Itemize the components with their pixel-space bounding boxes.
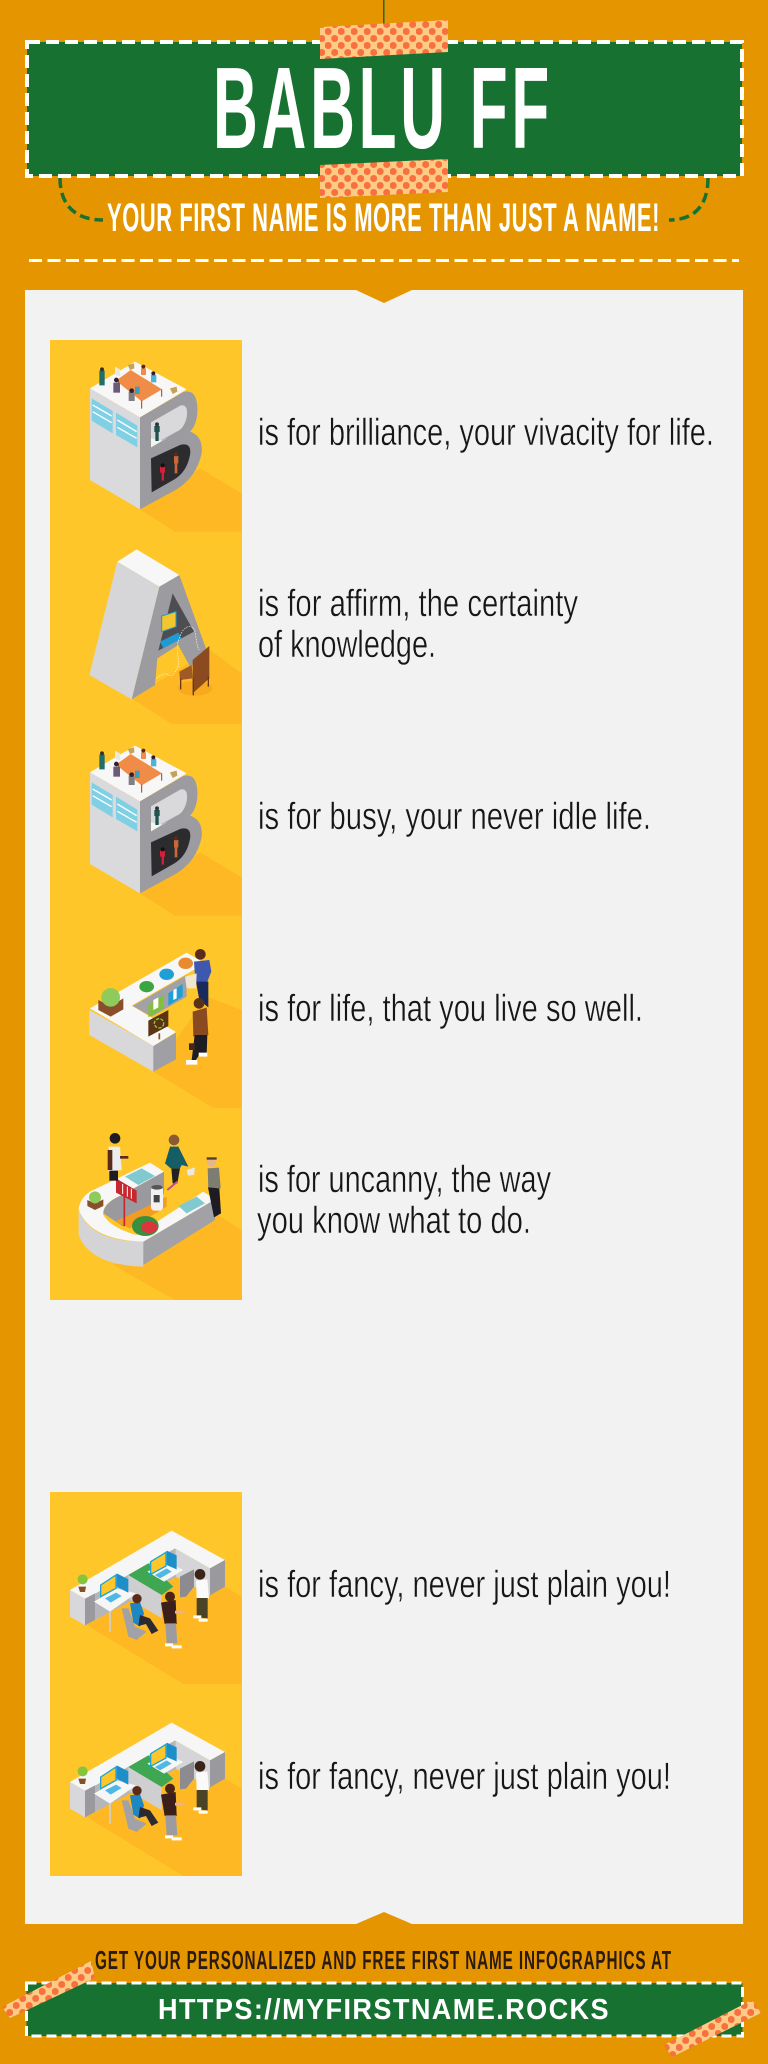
text: letter U (257, 1159, 551, 1242)
text: letter B, second: is for busy, your never idle life. (258, 796, 651, 838)
icon: letter L recycling counter (89, 949, 242, 1108)
text: letter U: is for uncanny, the way (258, 1159, 551, 1201)
title banner (27, 20, 742, 198)
icon: office desks, repeat (70, 1723, 242, 1876)
left tape (2, 1961, 95, 2018)
text: letter A: is for affirm, the certainty (258, 583, 578, 625)
subtitle with dashed brackets (60, 178, 708, 240)
footer url: HTTPS://MYFIRSTNAME.ROCKS (158, 1994, 610, 2026)
icon: letter B building, repeat (90, 746, 242, 916)
yellow column: lower (50, 1492, 242, 1876)
icon: letter U food counter (79, 1133, 242, 1300)
icon: letter A building (89, 549, 242, 724)
icon: letter B building (90, 362, 242, 532)
main panel (25, 290, 743, 1924)
right tape (664, 2000, 761, 2057)
bottom tape (320, 159, 448, 198)
icon: office desks (70, 1531, 242, 1684)
text: letter A (258, 583, 578, 666)
top tape (320, 20, 448, 59)
yellow column: upper (50, 340, 242, 1300)
footer banner (2, 1961, 761, 2057)
text: letter U: you know what to do. (257, 1200, 531, 1242)
top hanging string (383, 0, 384, 25)
text: letter L: is for life, that you live so well. (258, 988, 643, 1030)
text: letter A: of knowledge. (258, 624, 436, 666)
